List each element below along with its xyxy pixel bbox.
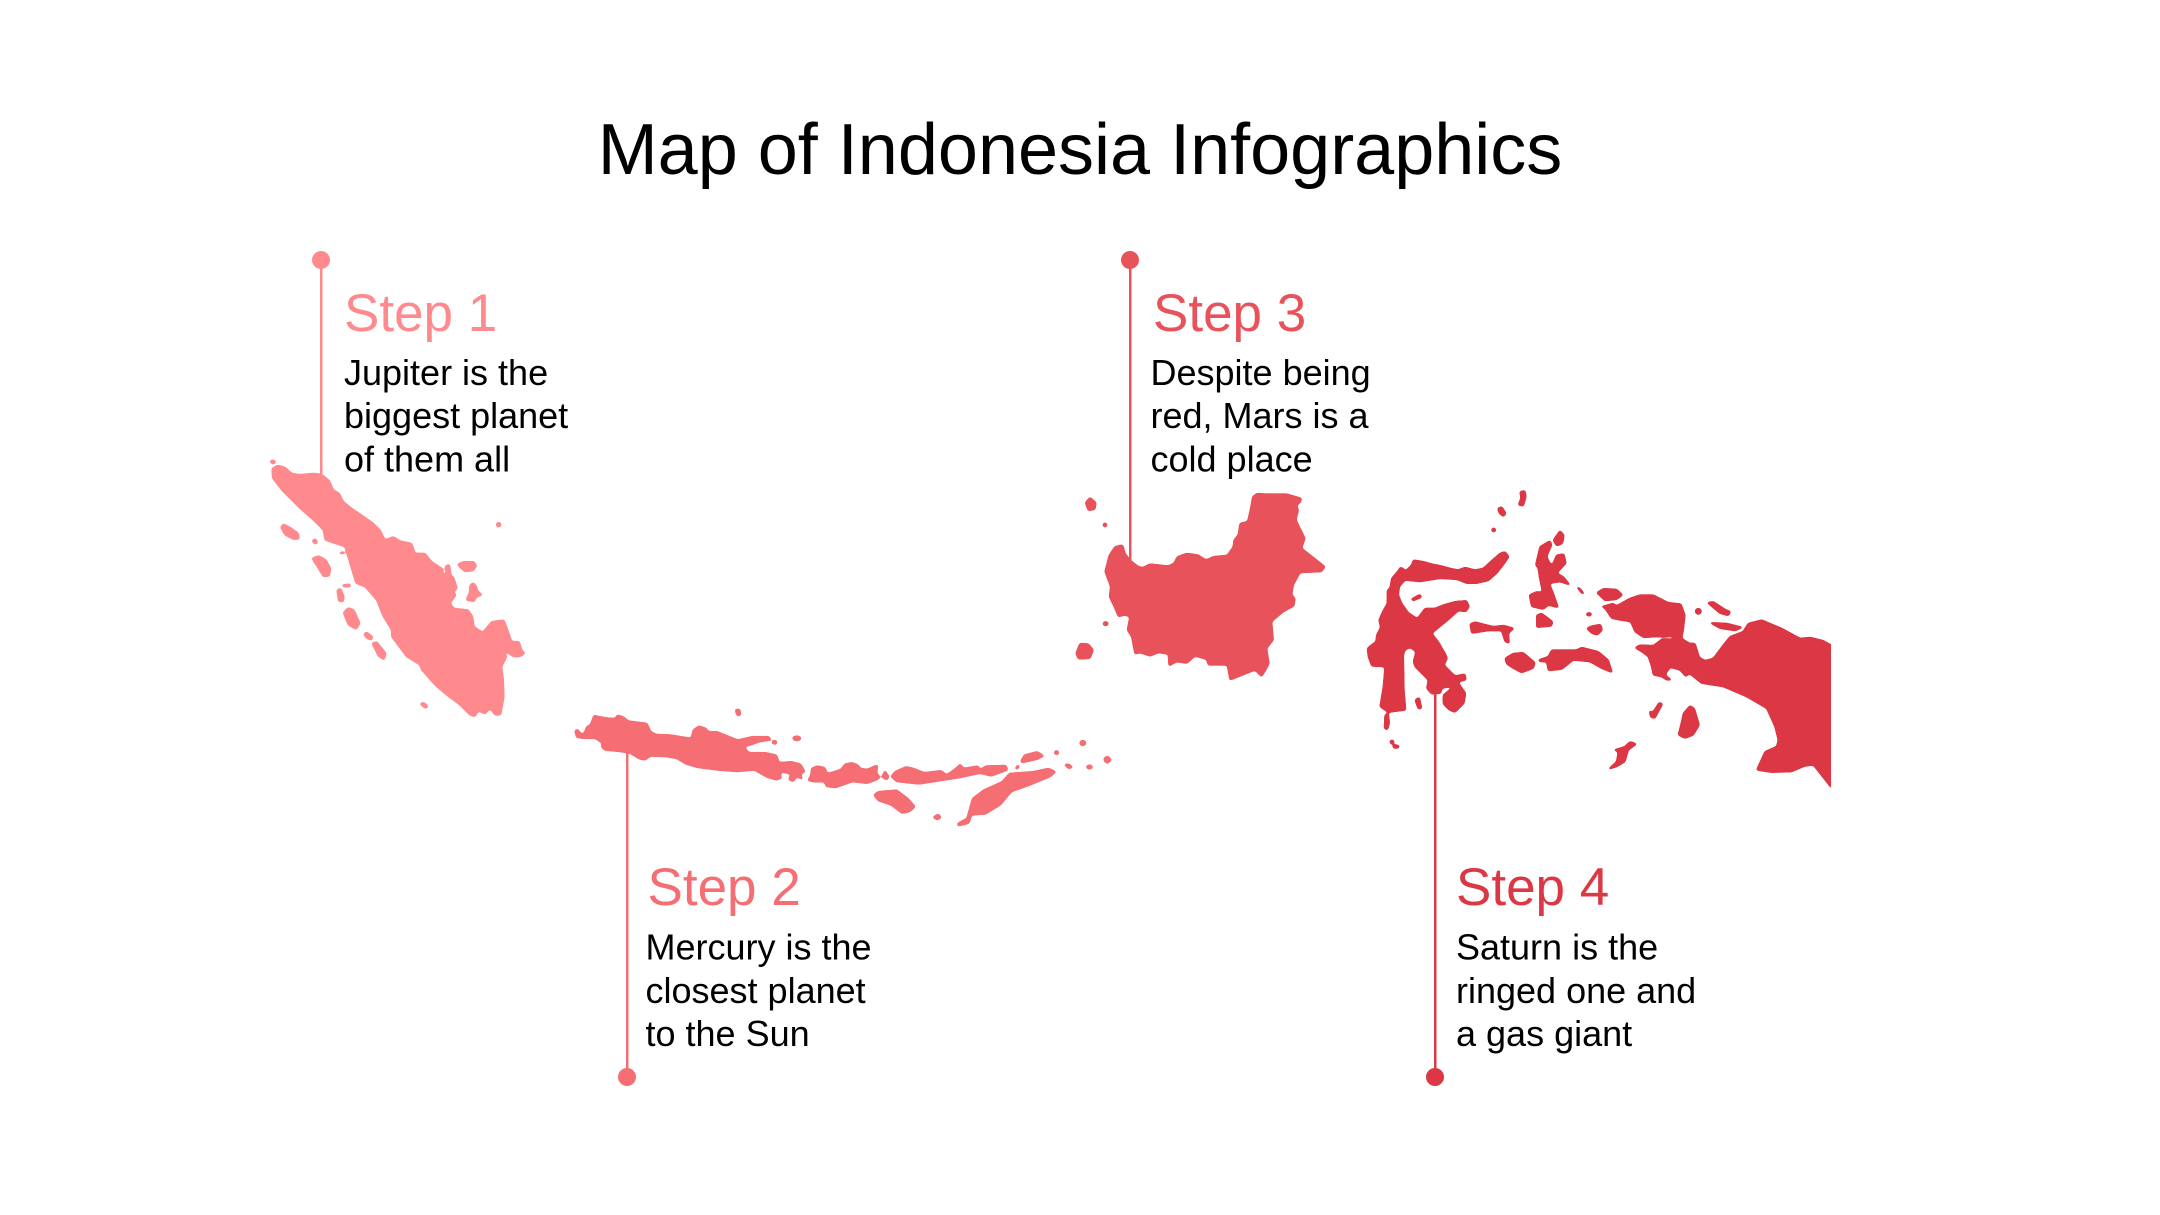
text block: step 3: Despite being <box>1150 352 1371 393</box>
text block: step 3: red, Mars is a <box>1150 395 1370 436</box>
text block: step 3 <box>1150 284 1371 480</box>
text block: step 1 <box>344 284 568 480</box>
connector: step 3 <box>1121 251 1139 562</box>
title: Map of Indonesia Infographics <box>598 110 1562 190</box>
text block: step 1: biggest planet <box>344 395 568 436</box>
text block: step 2 <box>646 858 872 1054</box>
text block: step 4 <box>1456 858 1696 1054</box>
text block: step 2: closest planet <box>646 970 866 1011</box>
text block: step 1: of them all <box>344 438 510 480</box>
text block: step 3: Step 3 <box>1153 284 1306 343</box>
text block: step 2: Mercury is the <box>646 926 872 968</box>
map: Java and Lesser Sunda Islands <box>575 709 1111 826</box>
text block: step 4: Saturn is the <box>1456 926 1658 968</box>
connector: step 2 <box>618 752 636 1086</box>
text block: step 2: Step 2 <box>648 858 801 917</box>
connector: step 1 <box>312 251 330 478</box>
text block: step 3: cold place <box>1150 438 1313 480</box>
text block: step 4: Step 4 <box>1456 858 1609 917</box>
connector: step 4 <box>1426 690 1444 1086</box>
map: Sulawesi, Maluku and Papua <box>1367 491 1843 788</box>
text block: step 2: to the Sun <box>646 1013 810 1054</box>
map: Sumatra <box>270 460 525 717</box>
text block: step 4: a gas giant <box>1456 1013 1632 1054</box>
text block: step 4: ringed one and <box>1456 970 1696 1011</box>
map: Kalimantan <box>1076 493 1325 680</box>
text block: step 1: Step 1 <box>344 284 497 343</box>
text block: step 1: Jupiter is the <box>344 352 548 393</box>
